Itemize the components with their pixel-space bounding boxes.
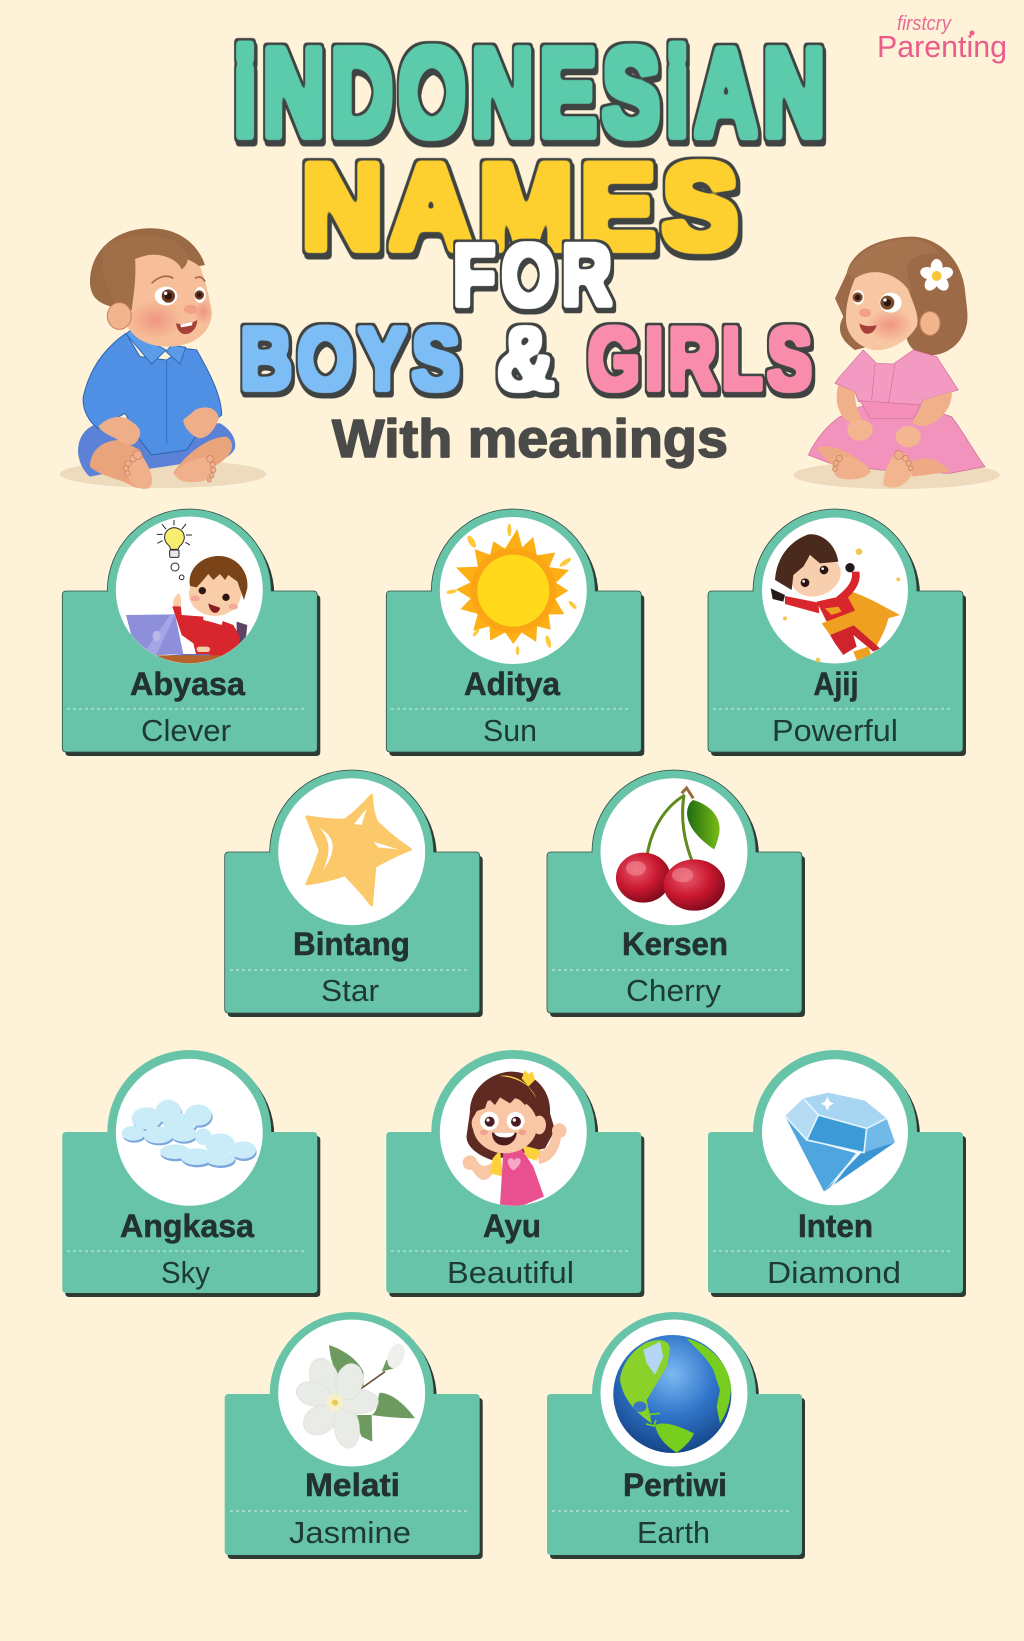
meaning: Powerful: Powerful: [772, 713, 898, 748]
title: Boys: BOYS: [240, 310, 465, 409]
name: Bintang: Bintang: [293, 926, 410, 962]
card: Inten: [708, 1050, 966, 1297]
card: Angkasa: [62, 1050, 320, 1297]
card: Kersen: [547, 770, 805, 1017]
icon: jasmine flower: [293, 1341, 415, 1450]
subtitle: With meanings: [332, 409, 728, 469]
card: Abyasa: [62, 509, 320, 756]
name: Kersen: Kersen: [622, 926, 728, 962]
icon: flying superhero boy: [771, 534, 900, 662]
card: Ajij: [708, 509, 966, 756]
card: Ayu: [386, 1050, 644, 1297]
icon: diamond: [785, 1093, 895, 1192]
icon: star: [307, 795, 411, 905]
icon: cherries: [616, 788, 725, 911]
meaning: Cherry: Cherry: [626, 973, 722, 1008]
meaning: Diamond: Diamond: [767, 1255, 901, 1290]
name: Abyasa: Abyasa: [130, 666, 245, 702]
meaning: Earth: Earth: [637, 1515, 710, 1550]
card: Bintang: [225, 770, 483, 1017]
illustration: baby boy: [60, 228, 267, 489]
title: Indonesian: iNDONESiAN: [233, 23, 830, 162]
meaning: Clever: Clever: [141, 713, 231, 748]
title: Girls: GIRLS: [588, 309, 817, 408]
name: Inten: Inten: [798, 1208, 873, 1244]
card: Melati: [225, 1312, 483, 1559]
card: Aditya: [386, 509, 644, 756]
title: For: FOR: [453, 227, 618, 324]
logo: FirstCry Parenting: Parenting: [877, 29, 1007, 64]
name: Angkasa: Angkasa: [120, 1208, 254, 1244]
illustration: baby girl: [793, 237, 1000, 489]
icon: clouds: [122, 1100, 257, 1168]
icon: boy with laptop and idea bulb: [126, 520, 248, 664]
name: Pertiwi: Pertiwi: [623, 1467, 727, 1503]
meaning: Sky: Sky: [161, 1255, 210, 1290]
card: Pertiwi: [547, 1312, 805, 1559]
meaning: Star: Star: [321, 973, 379, 1008]
icon: earth globe: [613, 1335, 731, 1453]
title: ampersand: &: [498, 309, 553, 408]
name: Melati: Melati: [305, 1467, 400, 1503]
meaning: Beautiful: Beautiful: [447, 1255, 574, 1290]
name: Ajij: Ajij: [814, 666, 858, 702]
icon: sun: [446, 524, 578, 655]
logo: FirstCry Parenting: [877, 13, 1007, 64]
meaning: Sun: Sun: [483, 713, 537, 748]
name: Aditya: Aditya: [464, 666, 560, 702]
icon: smiling girl: [463, 1070, 567, 1207]
name: Ayu: Ayu: [483, 1208, 541, 1244]
logo: FirstCry Parenting: firstcry: [897, 13, 952, 35]
meaning: Jasmine: Jasmine: [289, 1515, 411, 1550]
title: Names: NAMES: [301, 140, 744, 274]
